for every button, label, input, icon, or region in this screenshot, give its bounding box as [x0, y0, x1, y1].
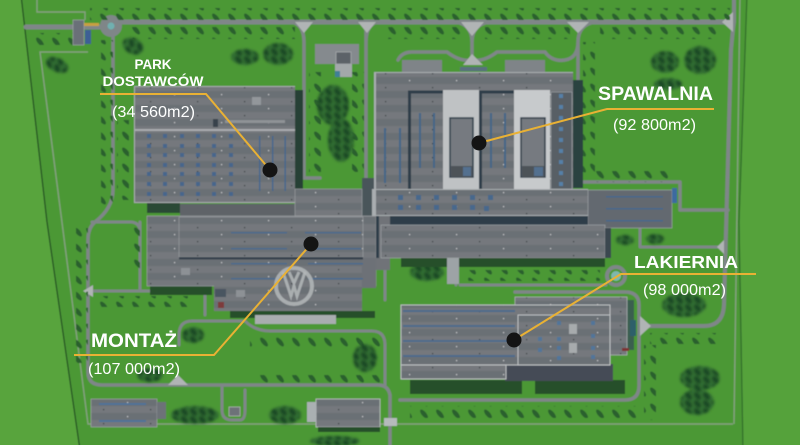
label: spawalnia: SPAWALNIA: [598, 83, 713, 105]
building: south-centre workshop: [307, 399, 397, 432]
roundabout: [100, 15, 122, 37]
label: montaż: [74, 236, 318, 378]
label: lakiernia: (98 000m2): [643, 282, 726, 299]
building: small service building: [315, 44, 359, 77]
label: park dostawców: DOSTAWCÓW: [102, 72, 204, 89]
top parking and loading docks: [402, 60, 545, 72]
label: spawalnia: [472, 83, 714, 150]
label: park dostawców: PARK: [134, 57, 172, 72]
label: spawalnia: (92 800m2): [613, 117, 696, 134]
label: park dostawców: [100, 57, 278, 178]
label: lakiernia: [506, 252, 756, 348]
label: montaż: (107 000m2): [88, 361, 180, 378]
roundabout lakiernia: [607, 267, 625, 285]
building: lakiernia: [401, 297, 634, 394]
building: south-west workshop: [91, 399, 166, 427]
label: park dostawców: (34 560m2): [112, 104, 195, 121]
parked vehicles: [622, 320, 636, 351]
building: small pavilion: [229, 407, 240, 416]
building: montaż: [147, 178, 390, 324]
label: montaż: MONTAŻ: [91, 329, 177, 352]
tree clumps: [43, 34, 720, 445]
building: spawalnia: [372, 72, 677, 284]
building: park dostawców: [134, 86, 303, 203]
courtyard right: [514, 90, 550, 189]
label: lakiernia: LAKIERNIA: [634, 252, 738, 272]
building: gatehouse: [73, 20, 99, 45]
skylights grid: [147, 134, 233, 196]
VW logo: [276, 268, 312, 304]
courtyard left: [443, 90, 479, 189]
